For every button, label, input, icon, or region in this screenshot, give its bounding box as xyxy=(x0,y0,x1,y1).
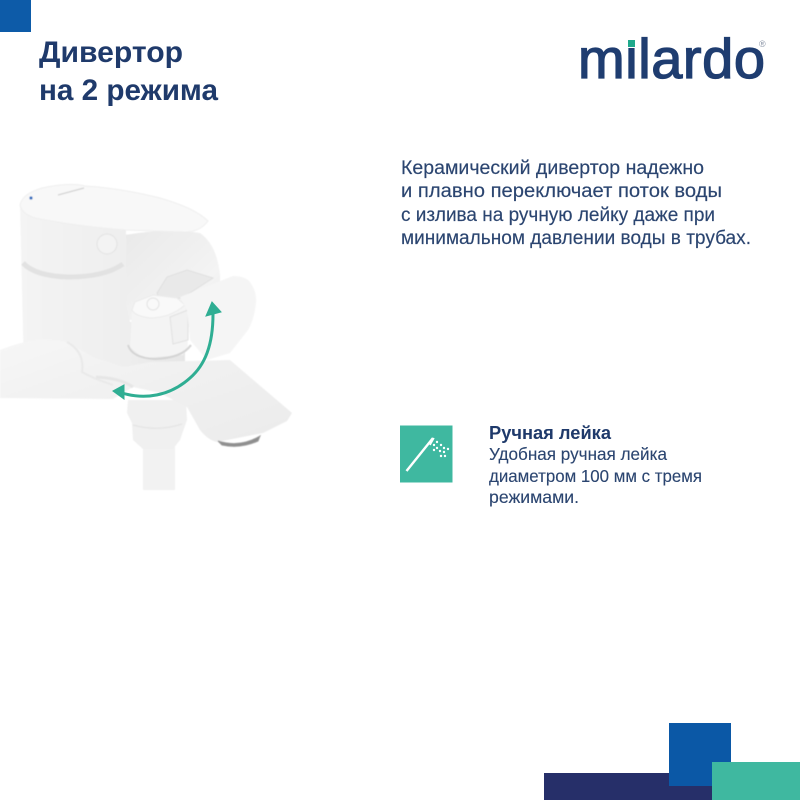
feature text: режимами. xyxy=(489,487,579,507)
faucet main body xyxy=(20,205,185,372)
faucet illustration xyxy=(0,184,292,490)
description paragraph: и плавно переключает поток воды xyxy=(401,181,722,202)
logo: milardo: milardo xyxy=(578,27,765,90)
faucet aerator xyxy=(218,436,260,446)
description paragraph: Керамический дивертор надежно xyxy=(401,158,704,179)
description paragraph: с излива на ручную лейку даже при xyxy=(401,205,715,226)
faucet spout xyxy=(0,340,292,442)
feature heading: Ручная лейка xyxy=(489,422,612,443)
corner blocks xyxy=(544,723,800,800)
feature text xyxy=(489,444,702,507)
feature text: Удобная ручная лейка xyxy=(489,444,667,464)
description paragraph: минимальном давлении воды в трубах. xyxy=(401,228,751,249)
faucet rear supply pipe xyxy=(143,445,175,490)
faucet lever handle top xyxy=(20,184,208,232)
diverter knob xyxy=(130,305,188,358)
title: Дивертор xyxy=(39,36,183,69)
logo: milardo: ® xyxy=(759,39,766,49)
faucet hexagon nut xyxy=(157,270,213,300)
arrow: rotation xyxy=(113,302,221,399)
description paragraph xyxy=(401,158,751,249)
faucet lower connector xyxy=(127,400,187,449)
title xyxy=(39,36,218,107)
corner square xyxy=(0,0,31,32)
feature text: диаметром 100 мм с тремя xyxy=(489,466,702,486)
faucet curved neck xyxy=(125,231,220,320)
hand shower holder xyxy=(180,276,256,360)
icon: hand shower xyxy=(400,426,452,482)
title: на 2 режима xyxy=(39,74,218,107)
